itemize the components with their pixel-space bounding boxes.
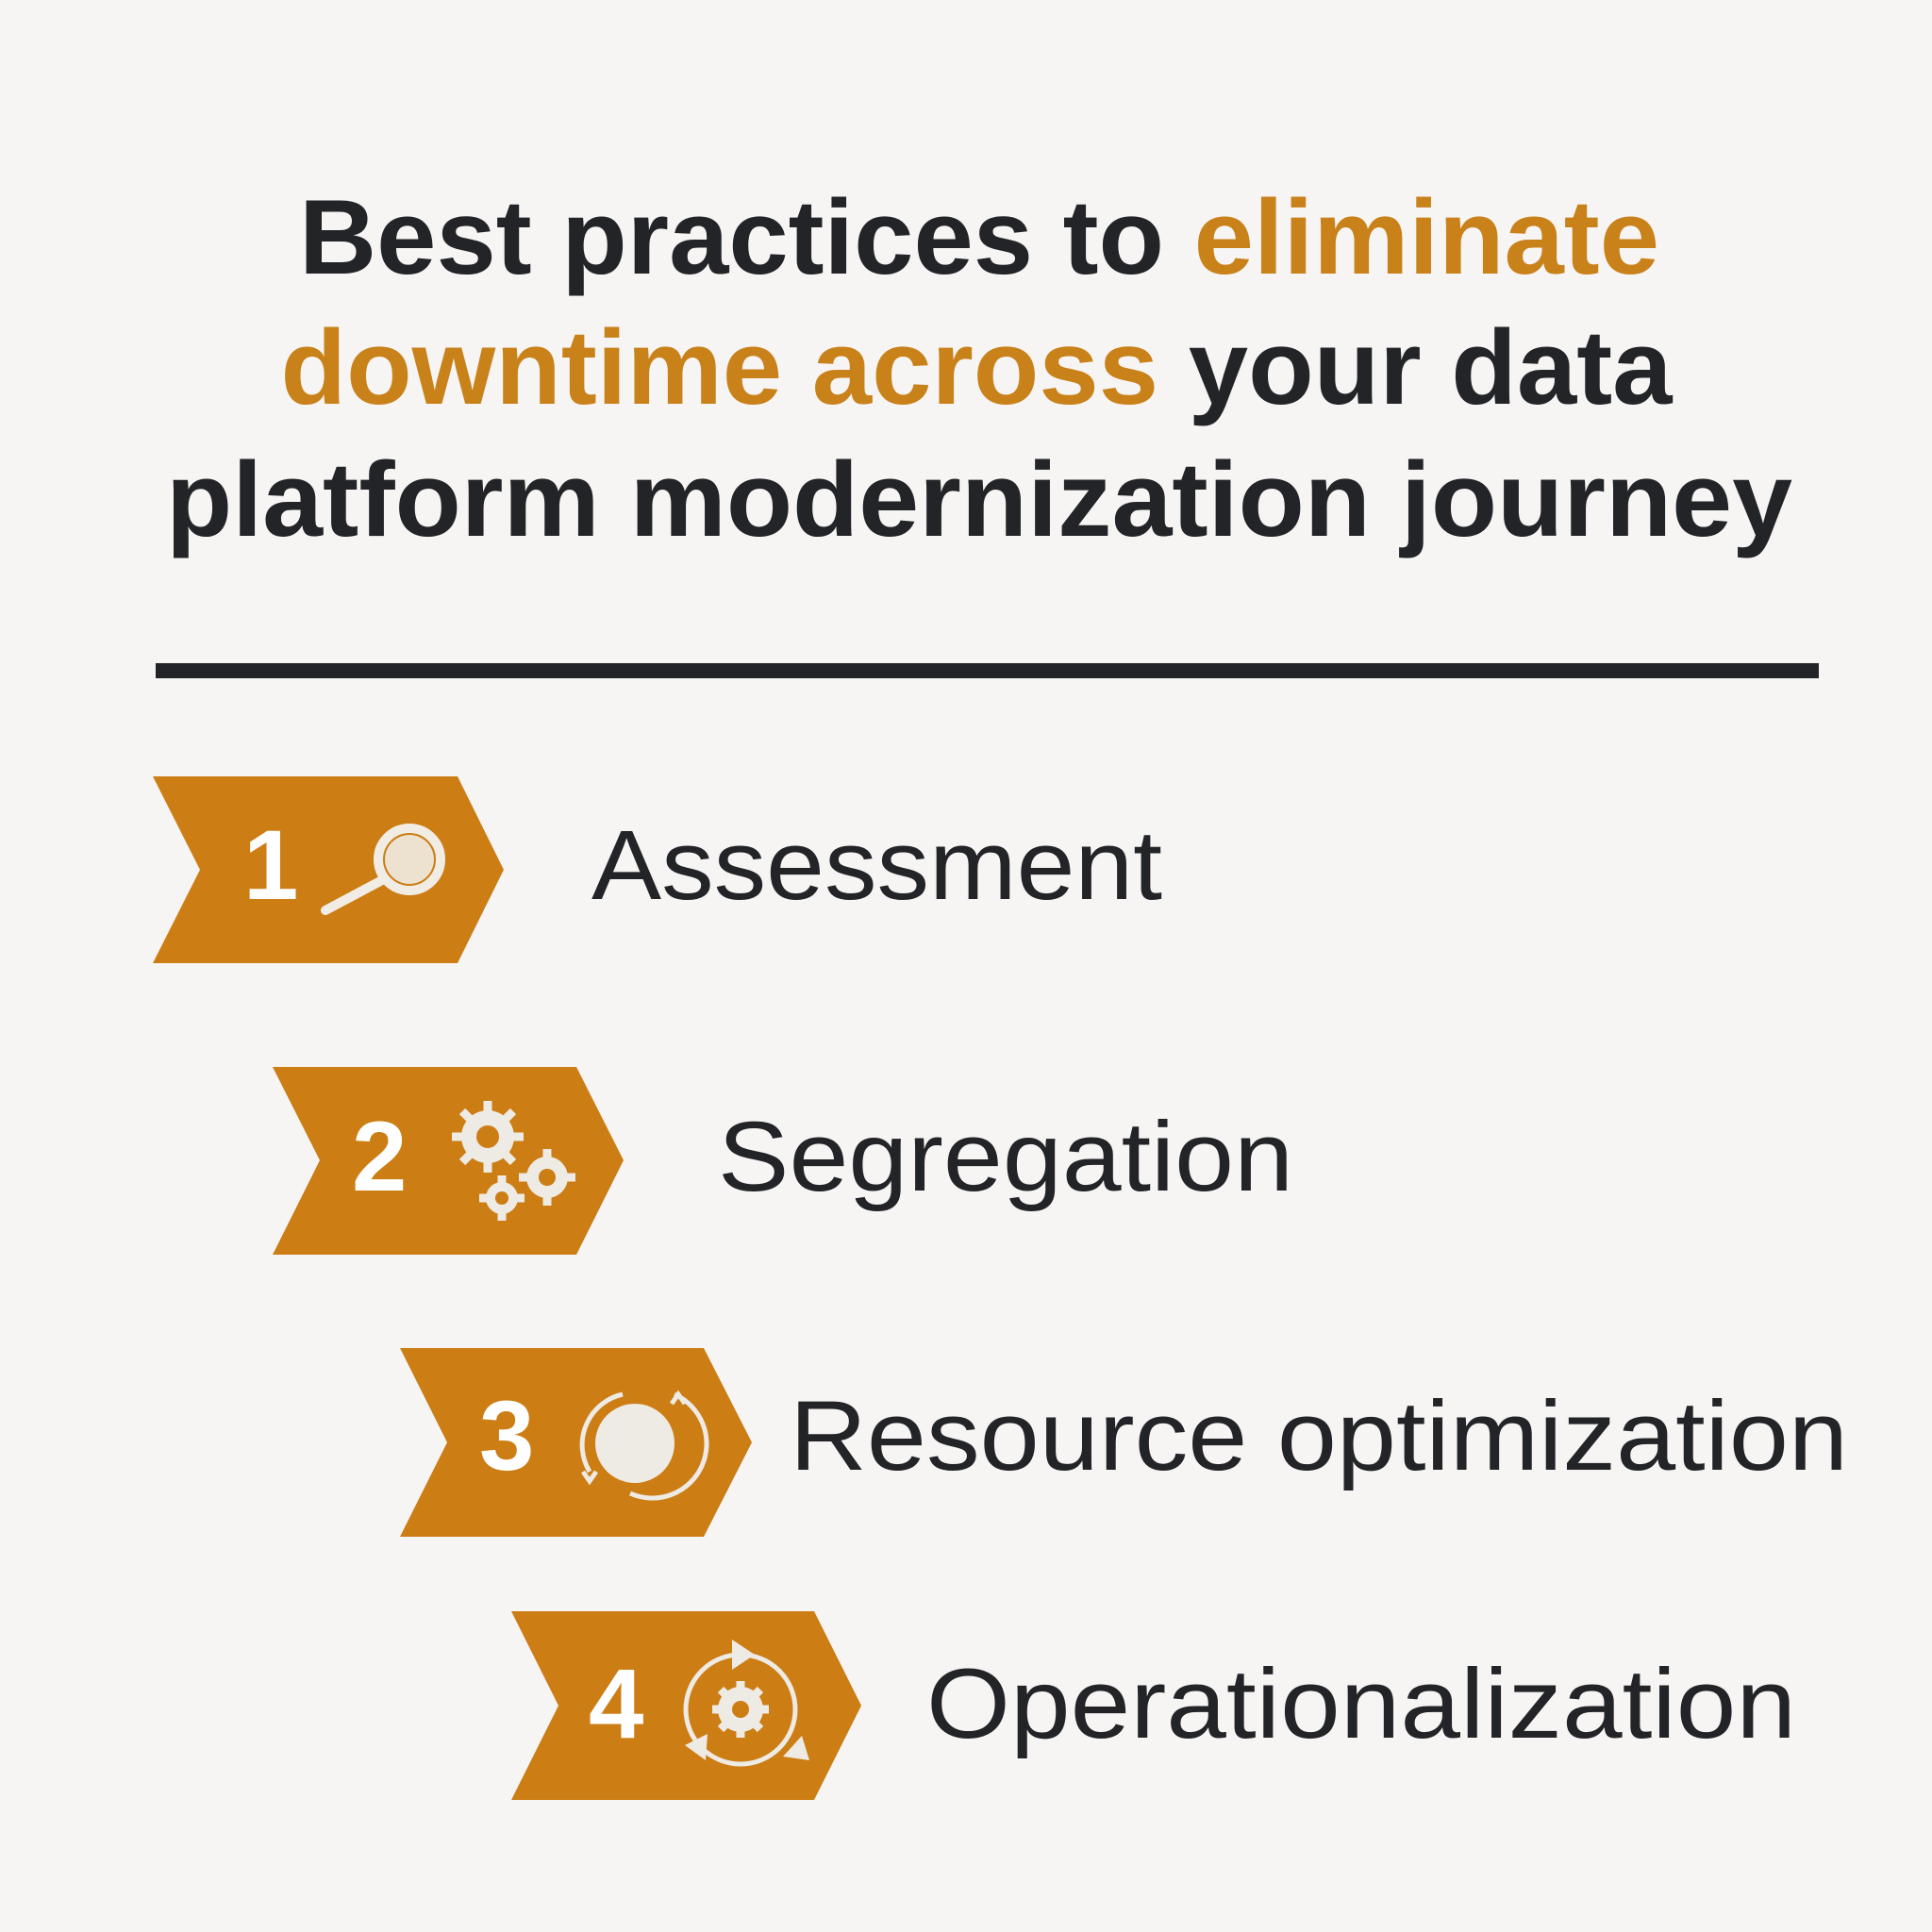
title: Best practices to eliminate (299, 178, 1659, 296)
step 1: Assessment: Assessment (591, 810, 1162, 921)
step 3: Resource optimization: Resource optimization (790, 1381, 1848, 1491)
title: platform modernization journey (166, 441, 1792, 558)
step 3: Resource optimization: 3 (479, 1381, 534, 1491)
step 1: Assessment (153, 776, 1162, 963)
step 4: Operationalization (511, 1611, 1796, 1800)
step 4: Operationalization: Operationalization (926, 1649, 1796, 1759)
step 3: Resource optimization (400, 1348, 1848, 1537)
title (166, 178, 1792, 558)
step 4: Operationalization: 4 (589, 1649, 643, 1759)
step 2: Segregation: Segregation (718, 1102, 1293, 1212)
icon: gear with cycle arrows (685, 1640, 809, 1764)
icon: magnifier (325, 828, 441, 910)
icon: resource cycle (582, 1394, 707, 1498)
step 2: Segregation (273, 1067, 1293, 1255)
title: downtime across your data (281, 308, 1673, 426)
icon: gears (452, 1101, 575, 1221)
step 2: Segregation: 2 (352, 1102, 407, 1212)
step 1: Assessment: 1 (243, 810, 298, 921)
